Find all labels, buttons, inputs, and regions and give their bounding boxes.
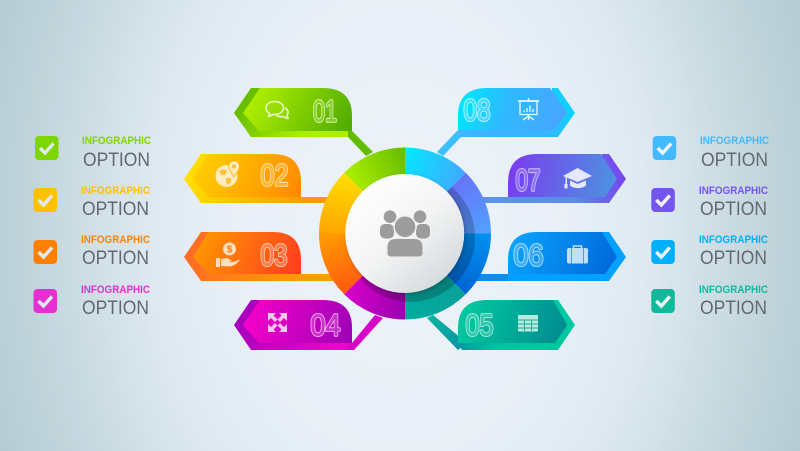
card 08 (437, 88, 575, 156)
icon: globe and pin (216, 161, 240, 187)
card 01 (234, 88, 373, 156)
right legend option 1: OPTION (701, 150, 768, 171)
left legend option 3: OPTION (82, 248, 149, 269)
right legend option 3: INFOGRAPHIC (699, 234, 768, 246)
number 03: 03 (260, 238, 288, 272)
number 02: 02 (260, 158, 288, 192)
card 05 (427, 300, 575, 350)
left legend option 2: OPTION (82, 199, 149, 220)
icon: graduation cap (563, 168, 592, 188)
right legend option 4: INFOGRAPHIC (699, 284, 768, 296)
right legend option 4: OPTION (700, 298, 767, 319)
number 05: 05 (466, 308, 494, 342)
number 01 (313, 94, 337, 128)
right legend option 4 (651, 284, 768, 319)
icon: table (518, 315, 538, 332)
number 03: 03 (260, 238, 288, 272)
number 01: 01 (313, 94, 337, 128)
number 05: 05 (466, 308, 494, 342)
card 07 (480, 154, 626, 203)
number 08: 08 (464, 92, 490, 128)
left legend option 4 (34, 284, 150, 319)
card 04 (234, 300, 383, 350)
left legend option 3 (34, 234, 150, 269)
number 02: 02 (260, 158, 288, 192)
left legend option 2 (34, 185, 150, 220)
number 07: 07 (516, 162, 540, 198)
number 04: 04 (310, 308, 340, 342)
right legend option 1: INFOGRAPHIC (700, 135, 769, 147)
central ring (319, 148, 491, 320)
icon: group of people (380, 210, 430, 257)
number 06: 06 (514, 238, 544, 272)
right legend option 2: OPTION (700, 199, 767, 220)
right legend option 2 (651, 185, 768, 220)
icon: presentation board (518, 98, 539, 120)
card 03 (184, 232, 338, 281)
card 06 (475, 232, 626, 281)
left legend option 3: INFOGRAPHIC (81, 234, 150, 246)
left legend option 4: INFOGRAPHIC (81, 284, 150, 296)
right legend option 2: INFOGRAPHIC (699, 185, 768, 197)
card 02 (184, 154, 336, 203)
left legend option 1 (35, 135, 151, 171)
central hub circle (345, 174, 466, 295)
right legend option 3 (651, 234, 768, 269)
left legend option 2: INFOGRAPHIC (81, 185, 150, 197)
left legend option 4: OPTION (82, 298, 149, 319)
icon: briefcase (567, 246, 588, 264)
left legend option 1: INFOGRAPHIC (82, 135, 151, 147)
number 07: 07 (516, 162, 540, 198)
icon: hand with coin: $ (227, 244, 233, 256)
number 08: 08 (464, 92, 490, 128)
icon: hand with coin (216, 242, 240, 267)
number 01: 01 (313, 94, 337, 128)
right legend option 1 (653, 135, 769, 171)
icon: expand arrows (268, 313, 287, 332)
left legend option 1: OPTION (83, 150, 150, 171)
number 04: 04 (310, 308, 340, 342)
right legend option 3: OPTION (700, 248, 767, 269)
number 06: 06 (514, 238, 544, 272)
icon: speech bubbles (266, 102, 288, 118)
